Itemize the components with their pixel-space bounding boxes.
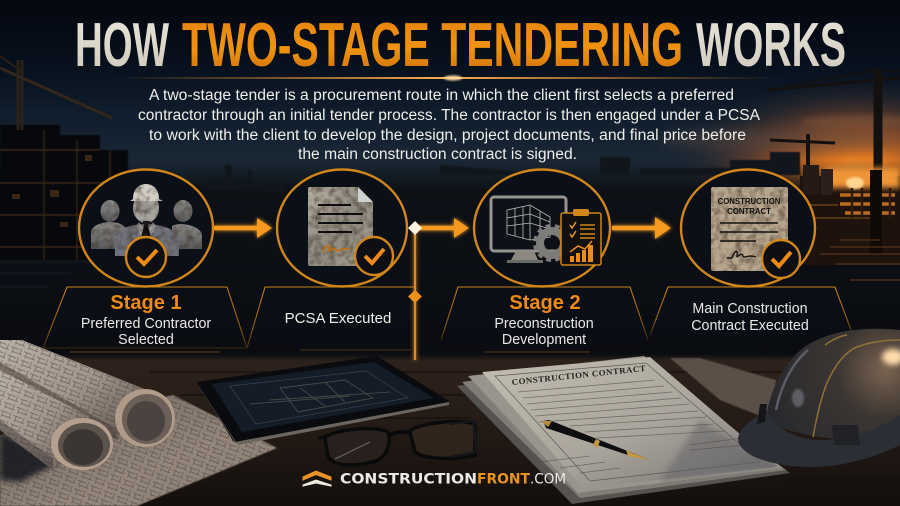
icon circle: preconstruction development — [474, 170, 610, 286]
panel: preconstruction development label — [440, 287, 648, 352]
heading: stage 2: Stage 2 — [509, 292, 581, 314]
icon: signed document — [308, 187, 373, 266]
label: preconstruction development: Preconstruction — [494, 316, 594, 332]
icon: hard hat — [738, 329, 900, 467]
icon: check badge — [355, 237, 393, 275]
sunset skyline buildings — [800, 165, 900, 265]
icon: monitor with wireframe building — [491, 197, 566, 263]
icon: check badge — [126, 237, 166, 277]
icon: glasses — [318, 422, 475, 465]
title word: HOW: HOW — [75, 11, 169, 80]
panel: preferred contractor label — [43, 287, 247, 352]
icon circle: preferred contractor — [79, 170, 213, 286]
icon: pen — [541, 420, 650, 460]
website name: FRONT — [477, 472, 530, 488]
label: preferred contractor selected: Preferred Contractor — [81, 316, 211, 332]
label: main construction contract executed: Main Construction — [692, 301, 808, 317]
intro paragraph: to work with the client to develop the design, project documents, and final price before — [149, 127, 746, 144]
intro paragraph: the main construction contract is signed. — [298, 146, 577, 163]
blueprint sheet on table — [0, 395, 277, 506]
icon circle: construction contract — [681, 170, 815, 286]
arrow: stage 2 to main contract — [612, 217, 671, 239]
second glasses arm beyond contract — [450, 421, 476, 457]
connector: stage 2 branch line — [415, 218, 469, 360]
document heading: CONTRACT — [727, 207, 771, 216]
icon: gear — [535, 226, 569, 260]
contract paper stack — [457, 356, 790, 504]
title underline glow — [115, 76, 780, 80]
icon: clipboard checklist and chart — [561, 209, 601, 265]
intro paragraph: contractor through an initial tender process. The contractor is then engaged under a PCSA — [138, 107, 761, 124]
icon: contract document — [711, 187, 788, 271]
diamond: branch node white — [408, 221, 422, 235]
document heading: CONSTRUCTION — [718, 197, 781, 206]
icon: chevrons — [303, 471, 331, 486]
footer logo — [303, 471, 566, 488]
icon circle: PCSA document — [277, 170, 407, 286]
diamond: branch node orange — [408, 290, 422, 303]
background: dusk construction site — [0, 33, 900, 288]
arrow: stage 1 to PCSA — [214, 218, 272, 238]
icon: side persons — [91, 200, 202, 249]
document behind contract — [670, 358, 776, 420]
panel: PCSA executed label — [247, 287, 415, 350]
website name: CONSTRUCTION — [340, 472, 477, 488]
label: preconstruction development: Development — [502, 332, 586, 348]
contract heading: CONSTRUCTION CONTRACT — [511, 364, 646, 387]
title — [78, 22, 844, 66]
website name: .COM — [530, 472, 566, 488]
icon: tablet with floor plan — [197, 356, 449, 445]
heading: stage 1: Stage 1 — [110, 292, 182, 314]
panel: main construction contract label — [650, 286, 852, 336]
table surface — [0, 354, 900, 506]
intro paragraph — [138, 87, 761, 163]
icon: lead person in hard hat — [115, 184, 179, 256]
label: main construction contract executed: Contract Executed — [691, 318, 809, 334]
label: PCSA executed: PCSA Executed — [285, 310, 391, 327]
icon: check badge — [762, 240, 800, 278]
icon: rolled blueprints — [0, 340, 175, 470]
intro paragraph: A two-stage tender is a procurement route in which the client first selects a preferred — [149, 87, 734, 104]
label: preferred contractor selected: Selected — [118, 332, 174, 348]
